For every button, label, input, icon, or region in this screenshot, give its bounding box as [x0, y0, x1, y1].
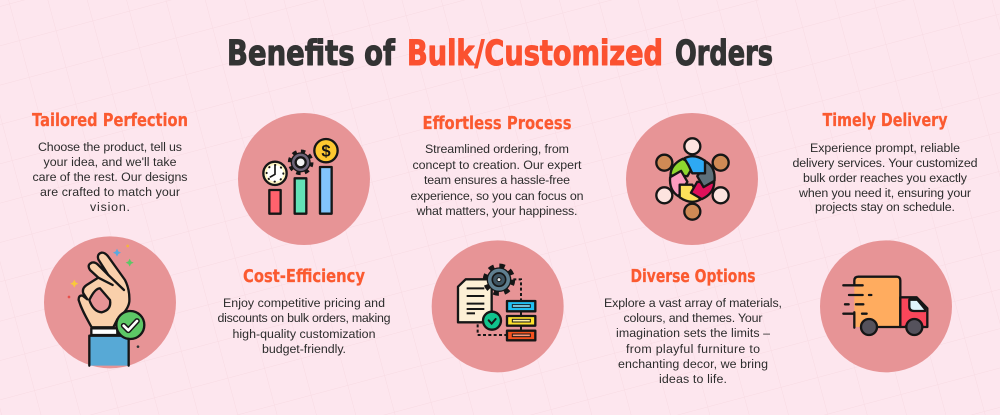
text block: cost-efficiency: high-quality customization	[232, 327, 376, 341]
text block: cost-efficiency: budget-friendly.	[262, 342, 346, 356]
heading: cost-efficiency: Cost-Efficiency	[243, 267, 365, 287]
text block: diverse options: Explore a vast array of materials,	[604, 296, 782, 310]
text block: tailored perfection	[32, 140, 188, 214]
panel: tailored perfection	[32, 111, 188, 368]
text block: diverse options: imagination sets the limits –	[616, 326, 770, 340]
icon: team circle	[626, 113, 758, 245]
text block: effortless process: experience, so you can focus on	[410, 189, 584, 203]
text block: tailored perfection: care of the rest. Our designs	[32, 170, 188, 184]
text block: diverse options: from playful furniture to	[626, 342, 760, 356]
text block: tailored perfection: vision.	[90, 200, 130, 214]
icon: bars with clock, gear and coin	[238, 113, 370, 245]
panel: effortless process	[410, 114, 584, 372]
heading: timely delivery: Timely Delivery	[822, 111, 948, 131]
text block: timely delivery: projects stay on schedule.	[815, 200, 955, 214]
text block: diverse options: enchanting decor, we bring	[618, 357, 768, 371]
text block: diverse options: colours, and themes. Your	[624, 311, 762, 325]
text block: tailored perfection: are crafted to match your	[40, 185, 180, 199]
text block: cost-efficiency: discounts on bulk orders, making	[218, 311, 391, 325]
heading: diverse options: Diverse Options	[630, 267, 756, 287]
text block: effortless process: what matters, your happiness.	[416, 204, 578, 218]
text block: timely delivery: delivery services. Your customized	[792, 156, 978, 170]
panel: diverse options	[604, 113, 782, 386]
icon: ok hand with check badge	[44, 236, 176, 368]
heading: tailored perfection: Tailored Perfection	[32, 111, 188, 131]
text block: effortless process: team ensures a hassle-free	[424, 173, 570, 187]
text block: effortless process: Streamlined ordering, from	[425, 142, 569, 156]
text block: cost-efficiency: Enjoy competitive pricing and	[223, 296, 385, 310]
text block: timely delivery: when you need it, ensuring your	[798, 186, 971, 200]
text block: effortless process: concept to creation. Our expert	[412, 158, 582, 172]
title: Benefits of	[227, 34, 396, 74]
text block: diverse options: ideas to life.	[659, 372, 727, 386]
panel: timely delivery	[792, 111, 978, 372]
icon: document, gear and flowchart	[432, 240, 564, 372]
icon: delivery truck	[820, 240, 952, 372]
heading: effortless process: Effortless Process	[422, 114, 572, 134]
text block: cost-efficiency	[218, 296, 391, 356]
text block: timely delivery: bulk order reaches you exactly	[803, 171, 968, 185]
text block: timely delivery: Experience prompt, reliable	[810, 141, 960, 155]
text block: tailored perfection: Choose the product, tell us	[38, 140, 182, 154]
icon: bars with clock, gear and coin: $	[321, 142, 331, 161]
panel: cost-efficiency	[218, 113, 391, 356]
title: Bulk/Customized	[407, 34, 663, 74]
title	[227, 34, 773, 74]
title: Orders	[675, 34, 773, 74]
text block: timely delivery	[792, 141, 978, 214]
text block: diverse options	[604, 296, 782, 386]
text block: effortless process	[410, 142, 584, 218]
text block: tailored perfection: your idea, and we'll take	[44, 155, 177, 169]
